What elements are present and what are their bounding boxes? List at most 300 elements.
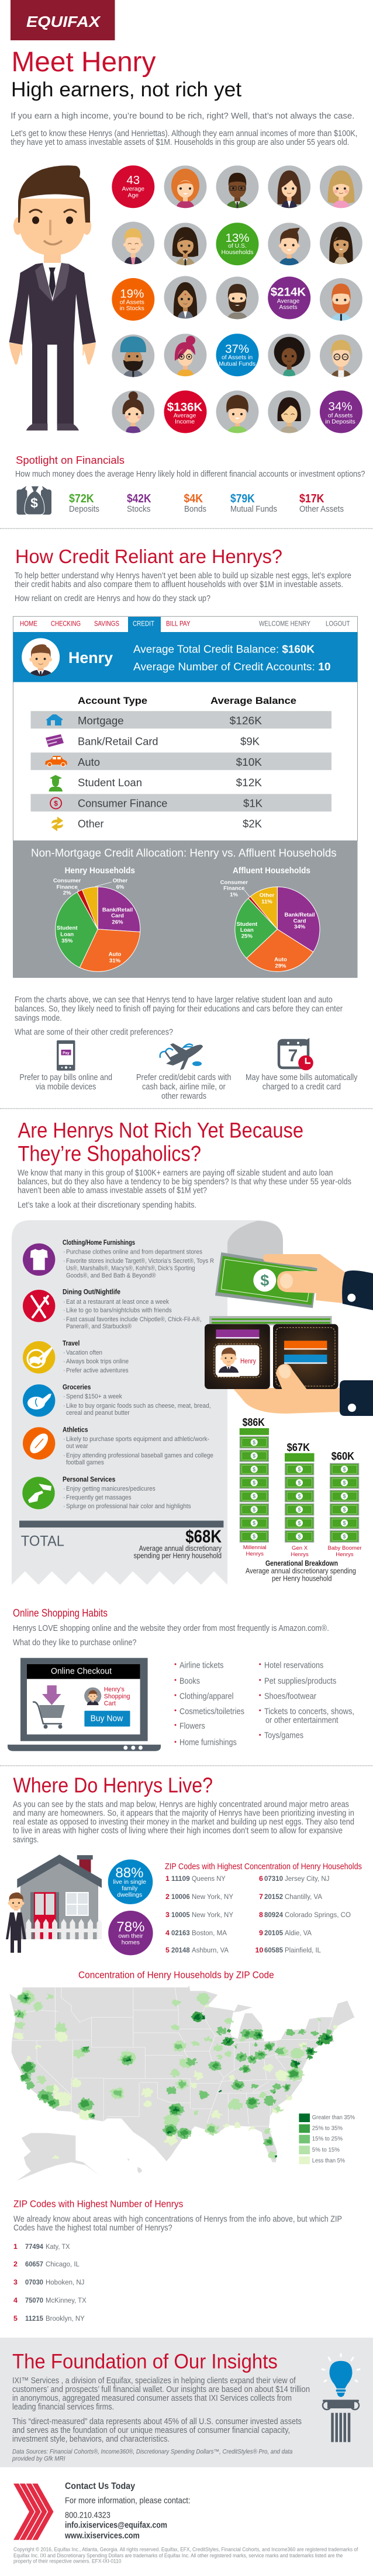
item: athletics: football games (66, 1459, 104, 1466)
caption: rewards cards (136, 1073, 232, 1101)
list: zip codes by concentration: 1 (165, 1874, 170, 1883)
illustration: laptop checkout (8, 1658, 161, 1751)
illustration: house with Henry (6, 1855, 102, 1953)
text: about IXI: leading financial services firms. (12, 2403, 114, 2412)
item: athletics: · (63, 1452, 65, 1459)
illustration: hand holding cash (215, 1252, 373, 1310)
caption: generational breakdown: Generational Breakdown (265, 1560, 338, 1568)
cart owner: Cart (104, 1700, 116, 1707)
avatar: blond man (112, 222, 154, 265)
item: clothing: Us®, Marshalls®, Macy’s®, Kohl’s®, Dick’s Sporting (66, 1265, 195, 1272)
caption: auto charged bills: charged to a credit card (263, 1082, 341, 1092)
logo: Equifax: EQUIFAX (26, 13, 101, 30)
item: personal services: · (63, 1503, 65, 1510)
account header: Average Total Credit Balance: $160K (133, 643, 315, 655)
pie chart: Henry households: 6% (116, 884, 125, 891)
row: auto: $10K (236, 756, 262, 768)
icon: lightbulb on column (322, 2354, 360, 2442)
pie chart: affluent households: 34% (294, 924, 306, 931)
cart owner: Henry’s (104, 1686, 125, 1693)
stat: mutual funds (230, 492, 277, 514)
item: groceries: Spend $150+ a week (66, 1393, 122, 1400)
text: about IXI: IXI™ Services , a division of Equifax, specializes in helping clients expand their view of (12, 2376, 296, 2386)
item: personal services: Frequently get massages (66, 1494, 132, 1501)
text: data sources: Data Sources: Financial Cohorts®, Income360®, Discretionary Spending Dollars™, CreditStyles® Pro, and data (12, 2449, 292, 2456)
item: travel: Prefer active adventures (66, 1367, 129, 1374)
item: athletics: Athletics (63, 1427, 88, 1434)
list: zip codes by total Henrys: Brooklyn, NY (46, 2314, 85, 2322)
icon: money bags (16, 486, 51, 515)
list: zip codes by concentration: Queens NY (192, 1874, 226, 1883)
stat: bonds: $4K (184, 492, 203, 505)
list: zip codes by total Henrys: 60657 (25, 2260, 43, 2268)
pie chart: Henry households: Card (111, 913, 124, 919)
list: zip codes by concentration: 8 (259, 1911, 263, 1919)
list: zip codes by concentration: 02163 (171, 1929, 190, 1937)
item: personal services: · (63, 1494, 65, 1501)
text: data sources (12, 2449, 292, 2463)
stat: assets in stocks: of Assets (120, 300, 144, 306)
stat: average assets (268, 277, 310, 319)
item: travel: · (63, 1367, 65, 1374)
text: spending intro: We know that many in this group of $100K+ earners are paying off sizable student and auto loan (18, 1169, 333, 1178)
row: auto (45, 756, 262, 768)
item: travel: Always book trips online (66, 1358, 129, 1365)
stat: own homes: own their (118, 1933, 143, 1940)
list: zip codes by concentration: 20105 (264, 1929, 283, 1937)
avatar: red-bearded man (320, 278, 362, 321)
icon: phone with pay button: Pay (63, 1051, 70, 1055)
column: millennial (240, 1417, 269, 1557)
text: about IXI (12, 2376, 310, 2444)
item: athletics: Enjoy attending professional baseball games and college (66, 1452, 213, 1459)
pie chart: affluent households: Loan (240, 927, 254, 933)
nav bar: LOGOUT (326, 620, 350, 628)
avatar grid and stat bubbles (112, 165, 362, 433)
stat: bonds (184, 492, 206, 514)
column: baby boomer: $60K (331, 1450, 354, 1462)
pie chart: affluent households: Other (260, 893, 275, 899)
list: online purchases column 1: Airline tickets (179, 1661, 223, 1671)
avatar: man with long dark hair (164, 223, 207, 266)
list: zip codes by concentration: 10 (255, 1946, 263, 1954)
list: zip codes by total Henrys: 5 (13, 2314, 18, 2322)
column: gen x: Henrys (291, 1551, 309, 1558)
icon: money bags: $ (30, 495, 38, 511)
row: mortgage: $126K (230, 715, 262, 727)
contact block (64, 2481, 191, 2541)
row: other (51, 817, 262, 831)
stat: bonds: Bonds (184, 505, 206, 514)
column: baby boomer: Baby Boomer (327, 1545, 362, 1551)
illustration: hand holding cash: $ (260, 1272, 269, 1289)
stat: assets in stocks: in Stocks (120, 305, 144, 312)
item: clothing: Clothing/Home Furnishings (63, 1240, 135, 1247)
map legend: 15% to 25% (312, 2136, 343, 2142)
contact block: Contact Us Today (65, 2481, 135, 2491)
avatar: curly red-haired woman (164, 165, 207, 209)
map legend: Less than 5% (312, 2158, 345, 2164)
stat: assets in deposits: in Deposits (325, 419, 355, 425)
map legend (299, 2113, 355, 2164)
row: bank card (46, 734, 260, 748)
list: zip codes by total Henrys: 11215 (25, 2314, 43, 2322)
row: student loan: Student Loan (78, 777, 142, 789)
item: clothing: · (63, 1258, 65, 1265)
caption: mobile bill pay: via mobile devices (36, 1082, 96, 1092)
text: data sources: provided by Gfk MRI (12, 2456, 65, 2463)
list: zip codes by total Henrys (13, 2242, 87, 2322)
list: zip codes by concentration: 6 (259, 1874, 263, 1883)
item: dining: Like to go to bars/nightclubs with friends (66, 1307, 172, 1314)
total: spending per Henry household (134, 1552, 222, 1560)
avatar: woman with hair bun (112, 390, 154, 433)
caption: rewards cards: Prefer credit/debit cards with (136, 1073, 232, 1082)
list: zip codes by total Henrys: Hoboken, NJ (46, 2278, 84, 2286)
panel: non-mortgage credit allocation: Non-Mortgage Credit Allocation: Henry vs. Affluent Households (31, 848, 337, 860)
panel: online banking window (13, 616, 357, 841)
stat: single family: dwellings (117, 1892, 142, 1898)
map: concentration of Henry households (9, 1985, 355, 2181)
list: zip codes by concentration: 20148 (171, 1946, 190, 1954)
column: baby boomer (327, 1450, 362, 1558)
list: zip codes by concentration: 2 (165, 1893, 170, 1901)
list: zip codes by concentration: Aldie, VA (285, 1929, 312, 1937)
text: online shopping intro: What do they like to purchase online? (13, 1638, 137, 1648)
pie chart: Henry households: Loan (60, 932, 74, 938)
avatar: brunette woman (268, 165, 310, 209)
contact block: www.ixiservices.com (64, 2532, 140, 2541)
stat: average income: Average (174, 412, 196, 419)
copyright: property of their respective owners. EFX-IXI-0110 (13, 2558, 122, 2565)
avatar: woman with magenta bun and glasses (164, 334, 207, 377)
row: auto: Auto (78, 756, 100, 768)
item: groceries: cereal and peanut butter (66, 1409, 130, 1417)
contact block: info.ixiservices@equifax.com (65, 2521, 167, 2530)
item: dining: Eat at a restaurant at least once a week (66, 1299, 170, 1306)
logo: Equifax (11, 0, 115, 40)
avatar: man with spiky hair (268, 223, 310, 266)
item: dining: Dining Out/Nightlife (63, 1289, 120, 1296)
stat: mutual funds: $79K (230, 492, 255, 505)
stat: assets in deposits (320, 390, 362, 433)
avatar: woman with long dark hair (320, 222, 362, 265)
stat: single family: 88% (115, 1865, 143, 1881)
pie chart: Henry households: Consumer (53, 878, 81, 884)
avatar: bearded man (216, 277, 258, 320)
list: zip codes by concentration: 60585 (264, 1946, 283, 1954)
caption: rewards cards: other rewards (161, 1092, 206, 1101)
list: online purchases column 2: or other entertainment (265, 1715, 339, 1725)
row: student loan: $12K (236, 777, 262, 789)
stat: average assets: Assets (279, 304, 298, 311)
row: other: $2K (243, 818, 262, 830)
text: chart takeaway (15, 995, 343, 1037)
text: spending intro: haven’t been able to amass investable assets of $1M yet? (18, 1186, 207, 1196)
stat: share of US households: of U.S. (228, 243, 247, 249)
total: Average annual discretionary (139, 1544, 222, 1553)
text: credit intro (15, 571, 351, 603)
caption: mobile bill pay (19, 1073, 112, 1092)
nav bar: CREDIT (133, 620, 154, 628)
stat: own homes: homes (122, 1940, 140, 1946)
stat: stocks: Stocks (127, 505, 151, 514)
list: zip codes by concentration (165, 1874, 351, 1954)
stat: single family (108, 1859, 153, 1904)
stat: average age (112, 165, 154, 208)
list: zip codes by concentration: 80924 (264, 1911, 283, 1919)
list: zip codes by total Henrys: 1 (13, 2242, 18, 2251)
stat: own homes (108, 1911, 153, 1955)
intro text (11, 112, 357, 147)
list: zip codes by total Henrys: 77494 (25, 2242, 43, 2251)
list: zip codes by concentration: Chantilly, VA (285, 1893, 323, 1901)
item: travel: · (63, 1349, 65, 1356)
list: zip codes by concentration: New York, NY (192, 1911, 233, 1919)
pie chart: affluent households: 29% (275, 963, 286, 970)
stat: average income (164, 390, 207, 433)
pie chart: Henry households: Auto (109, 952, 122, 958)
text: spending intro (18, 1169, 351, 1210)
list: zip codes by concentration: 11109 (171, 1874, 190, 1883)
list: zip codes by total Henrys: McKinney, TX (46, 2296, 87, 2304)
pie chart: affluent households: 1% (230, 891, 238, 898)
stat: own homes: 78% (116, 1919, 144, 1935)
stat: share of US households: Households (222, 249, 253, 256)
stat: deposits: $72K (69, 492, 94, 505)
text: where intro: savings. (13, 1835, 39, 1845)
list: online purchases column 2 (259, 1661, 354, 1741)
nav bar: WELCOME HENRY (259, 620, 310, 628)
text: about IXI: and serves as the foundation of our unique measures of consumer financial capacity, (12, 2426, 290, 2435)
pie chart: affluent households: Consumer (220, 879, 248, 886)
stat: assets in mutual funds: of Assets in (222, 355, 253, 361)
column: baby boomer: Henrys (336, 1551, 354, 1558)
item: travel (23, 1341, 129, 1374)
stat: average age: Average (122, 186, 144, 193)
pie chart: Henry households: Other (113, 878, 128, 884)
cart owner (84, 1686, 130, 1707)
pie chart: affluent households: 11% (261, 898, 272, 905)
caption: generational breakdown: per Henry household (272, 1575, 332, 1583)
caption: generational breakdown: Average annual discretionary spending (246, 1567, 356, 1575)
item: travel: · (63, 1358, 65, 1365)
column: millennial: Henrys (246, 1551, 264, 1557)
icon: shopping cart (33, 1702, 65, 1729)
text: about IXI: in anonymous, aggregated measured consumer assets that IXI Services collects from (12, 2394, 292, 2403)
column: millennial: $86K (243, 1417, 265, 1428)
total (19, 1520, 223, 1560)
pie chart: affluent households: Card (293, 918, 306, 925)
list: online purchases column 2: Toys/games (264, 1731, 303, 1741)
icon: red chevrons (13, 2484, 54, 2540)
item: personal services: Splurge on professional hair color and highlights (66, 1503, 191, 1510)
row: consumer finance (50, 798, 263, 810)
item: travel: Travel (63, 1341, 80, 1348)
item: personal services: · (63, 1485, 65, 1492)
row: student loan (49, 775, 262, 791)
caption: mobile bill pay: Prefer to pay bills online and (19, 1073, 112, 1082)
icon: purple arrow (42, 1685, 61, 1705)
stat: average income: $136K (167, 400, 202, 414)
list: zip codes by total Henrys: 4 (13, 2296, 18, 2304)
text: highest number intro: Codes have the highest total number of Henrys? (13, 2224, 172, 2233)
pie chart: Henry households: 31% (109, 957, 121, 964)
list: zip codes by concentration: 9 (259, 1929, 263, 1937)
nav bar: SAVINGS (94, 620, 119, 628)
avatar: man with glasses (216, 165, 258, 209)
list: online purchases column 2: Hotel reservations (264, 1661, 323, 1671)
text: chart takeaway: From the charts above, we can see that Henrys tend to have larger relative student loan and auto (15, 995, 333, 1005)
pie chart: Henry households: 2% (63, 890, 71, 897)
list: zip codes by concentration: Ashburn, VA (192, 1946, 229, 1954)
avatar: woman with black bob (268, 390, 310, 433)
item: clothing: Purchase clothes online and from department stores (66, 1249, 202, 1256)
avatar: blond man with glasses (320, 334, 362, 377)
stat: assets in mutual funds: 37% (225, 342, 249, 356)
stat: assets in stocks (112, 278, 154, 321)
panel: foundation of our insights (0, 2338, 373, 2467)
list: zip codes by concentration: 5 (165, 1946, 170, 1954)
item: dining: Panera®, and Starbucks® (66, 1323, 132, 1330)
text: chart takeaway: savings mode. (15, 1014, 62, 1023)
avatar: woman with afro (268, 334, 310, 377)
pie chart: Henry households: 26% (112, 919, 123, 926)
list: zip codes by concentration: 4 (165, 1929, 170, 1937)
pie chart: affluent households (220, 879, 320, 971)
row: bank card: $9K (240, 736, 260, 748)
total: TOTAL (21, 1533, 64, 1550)
chart: generational spending stacks (240, 1417, 362, 1583)
heading: map title: Concentration of Henry Households by ZIP Code (78, 1970, 274, 1981)
stat: average age: Age (128, 193, 139, 199)
stat: average age: 43 (126, 173, 140, 187)
stat: average income: Income (175, 419, 195, 425)
illustration: wallet in hand: Henry (240, 1358, 256, 1365)
account header (13, 632, 357, 682)
caption: rewards cards: cash back, airline mile, or (142, 1082, 226, 1092)
item: groceries: Groceries (63, 1384, 91, 1391)
button: buy now: Buy Now (91, 1714, 123, 1724)
contact block: 800.210.4323 (65, 2511, 110, 2521)
table: account balances: Account Type (78, 695, 147, 706)
panel: non-mortgage credit allocation: Affluent Households (233, 866, 310, 876)
list: zip codes by total Henrys: 2 (13, 2260, 18, 2268)
stat: average assets: Average (277, 298, 299, 304)
stat: assets in deposits: 34% (328, 400, 353, 414)
illustration: wallet in hand (205, 1316, 373, 1416)
stat: other assets: $17K (299, 492, 324, 505)
pie chart: affluent households: Finance (223, 886, 244, 892)
panel: foundation of our insights: The Foundation of Our Insights (12, 2350, 278, 2373)
item: personal services (22, 1477, 191, 1510)
row: consumer finance: Consumer Finance (78, 798, 167, 810)
stat: single family: live in single (113, 1879, 146, 1886)
heading: shopaholics: They’re Shopaholics? (18, 1142, 201, 1166)
heading: shopaholics: Are Henrys Not Rich Yet Because (18, 1119, 303, 1143)
list: online purchases column 2: Pet supplies/products (264, 1676, 336, 1686)
stat: deposits: Deposits (69, 505, 99, 514)
stat: other assets: Other Assets (299, 505, 344, 514)
column: millennial: Millennial (243, 1544, 267, 1551)
stat: other assets (299, 492, 344, 514)
row: bank card: Bank/Retail Card (78, 736, 158, 748)
item: groceries: · (63, 1393, 65, 1400)
row: consumer finance: $ (54, 799, 58, 807)
item: clothing: Favorite stores include Target®, Victoria’s Secret®, Toys R (66, 1258, 214, 1265)
intro text: If you earn a high income, you’re bound to be rich, right? Well, that’s not always the case. (11, 112, 354, 121)
stat: share of US households: 13% (225, 231, 250, 245)
table: account balances: Average Balance (210, 695, 296, 706)
heading: highest number of Henrys: ZIP Codes with Highest Number of Henrys (13, 2198, 183, 2209)
stat: stocks: $42K (127, 492, 151, 505)
list: zip codes by total Henrys: Katy, TX (46, 2242, 70, 2251)
stat: share of US households (216, 223, 258, 265)
illustration: large Henry figure (9, 165, 96, 431)
pie chart: affluent households: Auto (274, 957, 287, 963)
item: groceries: Like to buy organic foods such as cheese, meat, bread, (66, 1402, 210, 1409)
caption: generational breakdown (246, 1560, 356, 1583)
text: where intro (13, 1800, 354, 1845)
nav bar (20, 617, 350, 632)
pie chart: Henry households (53, 878, 140, 971)
text: spending intro: Let’s take a look at their discretionary spending habits. (18, 1201, 196, 1210)
list: zip codes by total Henrys: 75070 (25, 2296, 43, 2304)
row: consumer finance: $1K (243, 798, 263, 810)
column: gen x: Gen X (292, 1545, 308, 1551)
button: buy now (84, 1711, 130, 1727)
item: dining: Fast casual favorites include Chipotle®, Chick-Fil-A®, (66, 1316, 202, 1323)
map legend: 25% to 35% (312, 2125, 343, 2131)
icon: phone with pay button (57, 1040, 75, 1071)
stat: assets in stocks: 19% (120, 287, 144, 300)
column: gen x: $67K (287, 1442, 310, 1453)
avatar: woman with bindi (164, 276, 207, 319)
panel: non-mortgage credit allocation (13, 841, 358, 978)
row: other: Other (78, 818, 103, 830)
heading: spotlight on financials: Spotlight on Financials (16, 454, 125, 466)
text: credit intro: How reliant on credit are Henrys and how do they stack up? (15, 594, 210, 603)
cart owner: Shopping (104, 1693, 130, 1700)
text: highest number intro (13, 2215, 342, 2233)
nav bar: CHECKING (51, 620, 81, 628)
icon: calendar with clock: 7 (288, 1046, 298, 1065)
item: athletics: · (63, 1436, 65, 1443)
list: zip codes by total Henrys: Chicago, IL (46, 2260, 80, 2268)
item: athletics: Likely to purchase sports equipment and athletic/work- (66, 1436, 209, 1443)
subtitle: High earners, not rich yet (11, 78, 241, 101)
list: zip codes by concentration: 07310 (264, 1874, 283, 1883)
nav bar: BILL PAY (166, 620, 191, 628)
map legend: 5% to 15% (312, 2147, 340, 2153)
item: clothing: · (63, 1249, 65, 1256)
list: zip codes by concentration: Plainfield, IL (285, 1946, 321, 1954)
account header: Average Number of Credit Accounts: 10 (133, 661, 331, 673)
list: zip codes by concentration: New York, NY (192, 1893, 233, 1901)
text: about IXI: customers’ and prospects’ full financial wallet. Our insights are based on about $14 trillion (12, 2385, 310, 2394)
item: travel: Vacation often (66, 1349, 102, 1356)
stat: assets in deposits: of Assets (328, 412, 353, 419)
item: athletics: out wear (66, 1443, 88, 1450)
nav bar: HOME (20, 620, 37, 628)
item: groceries (23, 1384, 210, 1417)
item: personal services: Enjoy getting manicures/pedicures (66, 1485, 156, 1492)
list: zip codes by concentration: 10006 (171, 1893, 190, 1901)
stat: assets in mutual funds (216, 334, 258, 376)
list: zip codes by concentration: Jersey City, NJ (285, 1874, 330, 1883)
stat: single family: family (122, 1886, 138, 1892)
list: zip codes by concentration: Boston, MA (192, 1929, 227, 1937)
